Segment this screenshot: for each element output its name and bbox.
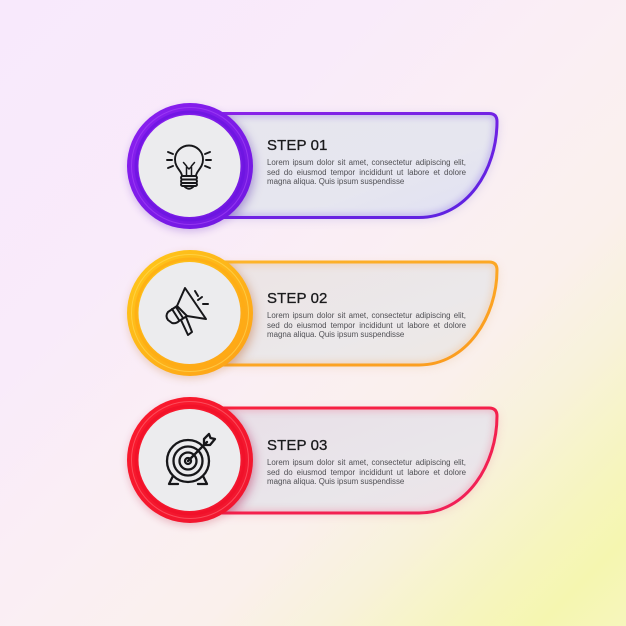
body text: step 1: magna aliqua. Quis ipsum suspendisse (267, 177, 404, 186)
heading: step 2: STEP 02 (267, 290, 327, 307)
body text: step 1 (267, 158, 466, 186)
circle badge: step 2 (127, 250, 253, 379)
circle badge: step 3 (127, 397, 253, 526)
infographic graphics (124, 102, 501, 530)
panel: step 3 card (222, 406, 501, 518)
heading: step 1: STEP 01 (267, 137, 327, 154)
text block: step 3 (267, 437, 466, 486)
text block: step 2 (267, 290, 466, 339)
icon: target (167, 434, 215, 484)
body text: step 2: sed do eiusmod tempor incididunt ut labore et dolore (267, 321, 466, 330)
heading: step 3: STEP 03 (267, 437, 327, 454)
body text: step 3: magna aliqua. Quis ipsum suspendisse (267, 477, 404, 486)
icon: light bulb (167, 146, 211, 189)
body text: step 2 (267, 311, 466, 339)
panel: step 1 card (222, 112, 501, 222)
body text: step 1: Lorem ipsum dolor sit amet, consectetur adipiscing elit, (267, 158, 466, 167)
icon: megaphone (166, 288, 208, 335)
body text: step 3: Lorem ipsum dolor sit amet, consectetur adipiscing elit, (267, 458, 466, 467)
body text: step 1: sed do eiusmod tempor incididunt ut labore et dolore (267, 168, 466, 177)
circle badge: step 1 (127, 103, 253, 232)
panel: step 2 card (223, 260, 501, 370)
body text: step 3 (267, 458, 466, 486)
body text: step 2: magna aliqua. Quis ipsum suspendisse (267, 330, 404, 339)
body text: step 2: Lorem ipsum dolor sit amet, consectetur adipiscing elit, (267, 311, 466, 320)
body text: step 3: sed do eiusmod tempor incididunt ut labore et dolore (267, 468, 466, 477)
text block: step 1 (267, 137, 466, 186)
